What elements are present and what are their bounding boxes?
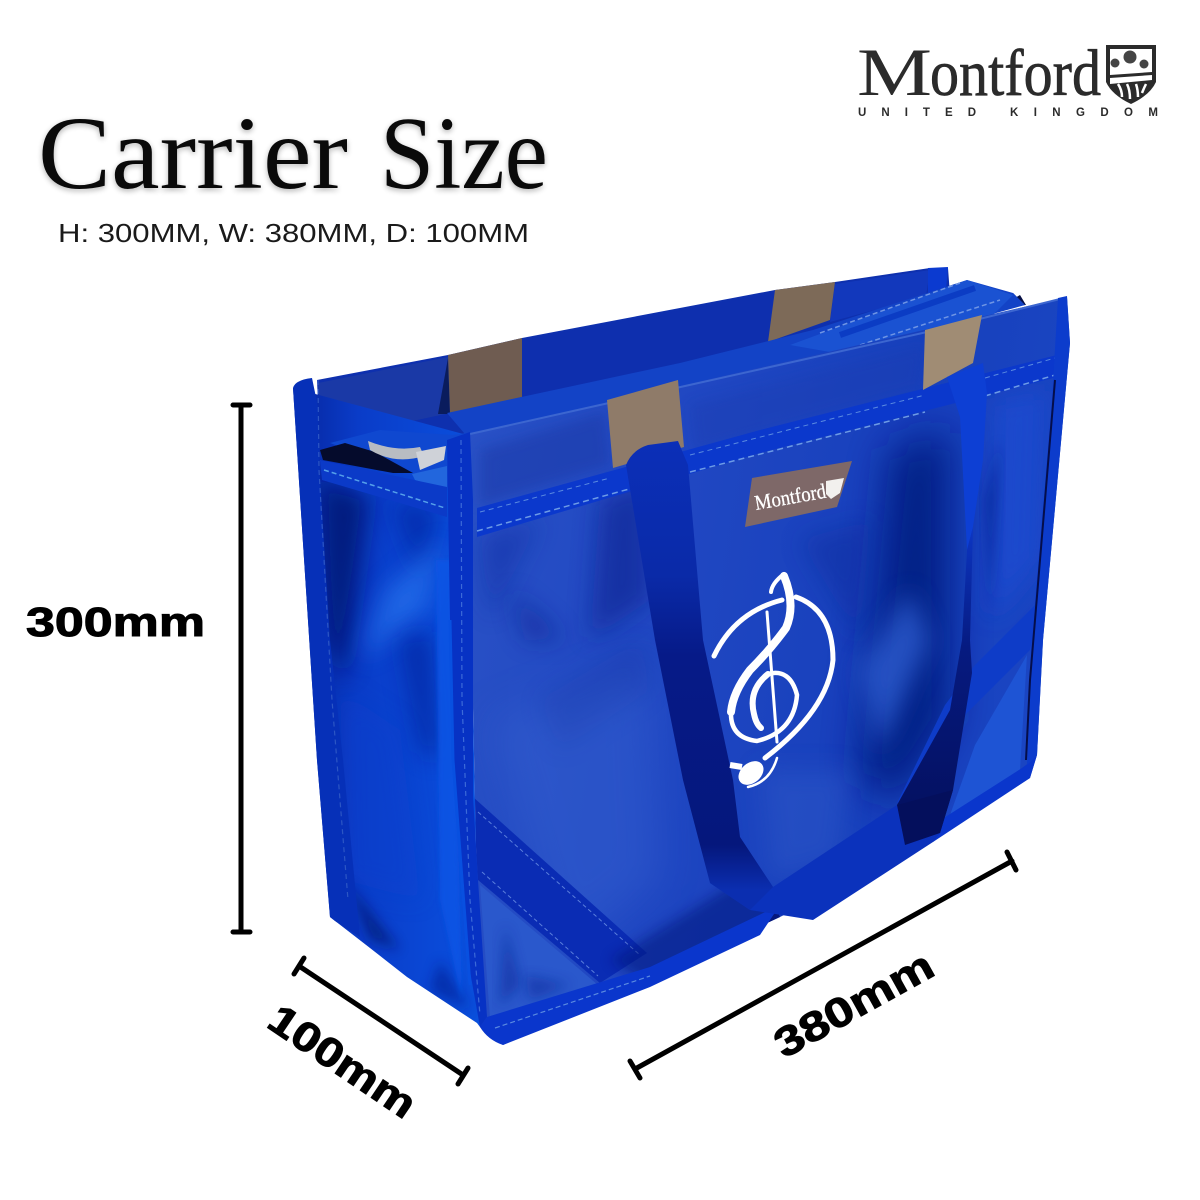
bottom binding: [480, 905, 780, 1045]
brand patch: Montford: [745, 461, 852, 527]
arrow: depth line: [294, 958, 468, 1084]
front panel: [467, 297, 1070, 1045]
arrow: height line: [233, 405, 250, 932]
side webbing: [320, 460, 447, 517]
front top webbing: [477, 355, 1057, 537]
bottom-right diagonal webbing: [897, 600, 1040, 803]
dimension: width 380mm: 380mm: [766, 942, 941, 1067]
icon: logo shield: [1106, 45, 1156, 104]
icon: treble clef in circle: [714, 574, 833, 790]
logo: Montford United Kingdom: M: [857, 34, 932, 110]
inner zip lid: [447, 280, 1025, 440]
logo: Montford United Kingdom: KINGDOM: [1010, 107, 1158, 119]
bag: blue music carrier photo: [293, 267, 1070, 1045]
handle strap: [626, 363, 987, 920]
title: Size: [380, 98, 548, 213]
dimension: depth 100mm: 100mm: [260, 995, 425, 1127]
title: [38, 96, 548, 213]
right strap, upper and lower: [947, 363, 987, 550]
dimension: depth 100mm: [260, 958, 468, 1127]
bottom-right corner fabric: [950, 655, 1027, 815]
bottom-left corner fabric: [480, 885, 598, 1018]
fabric folds: [480, 412, 610, 505]
bottom-left diagonal webbing: [473, 797, 647, 983]
arrow: width line: [630, 852, 1016, 1078]
back panel: [317, 268, 1025, 450]
left side panel: [293, 388, 480, 1027]
icon: brown tab front left: [607, 380, 684, 468]
logo: Montford United Kingdom: ontford: [930, 37, 1101, 110]
title: Size: [380, 96, 548, 211]
subtitle: dimensions: H: 300MM, W: 380MM, D: 100MM: [58, 218, 529, 248]
dimension: height 300mm: [26, 405, 250, 932]
dark seam near bottom: [612, 888, 780, 974]
side lid and dark opening: [330, 430, 467, 490]
icon: brown tab back left: [448, 338, 522, 413]
lower-right binding: [925, 755, 1037, 842]
left edge binding: [293, 378, 360, 937]
logo: Montford United Kingdom: [857, 34, 1158, 119]
icon: brown tab back right: [768, 282, 835, 342]
title: Carrier: [38, 98, 348, 213]
brand patch: Montford: Montford: [753, 479, 828, 515]
icon: brown tab front right: [923, 315, 982, 390]
corner binding: [447, 432, 487, 1027]
logo: Montford United Kingdom: UNITED: [858, 107, 976, 119]
bottom band: [710, 805, 940, 920]
zip pull: [368, 441, 424, 459]
right edge binding: [1027, 296, 1070, 765]
dimension: height 300mm: 300mm: [26, 599, 205, 645]
left strap: [626, 441, 773, 910]
dimension: width 380mm: [630, 852, 1016, 1078]
title: Carrier: [38, 96, 348, 211]
